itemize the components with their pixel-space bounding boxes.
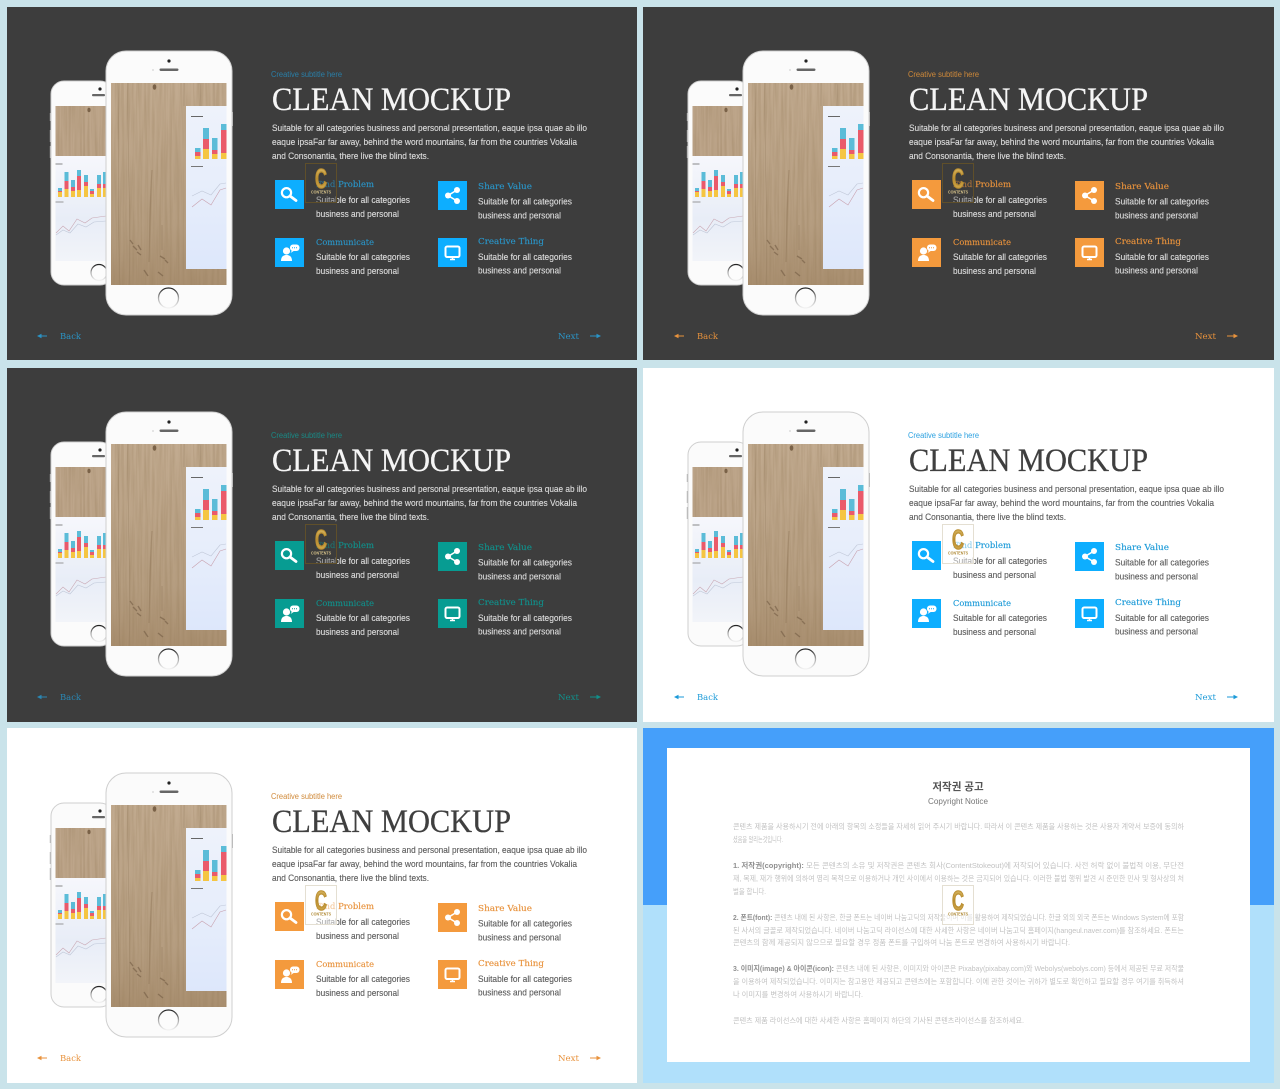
feature: communicate: Communicate [316, 960, 374, 970]
feature: creative thing: Creative Thing [1115, 237, 1182, 247]
title: CLEAN MOCKUP [909, 82, 1148, 118]
notice intro: 셨음을 알리는것입니다. [733, 834, 783, 844]
notice section 3 [733, 963, 1184, 999]
feature: creative thing: Suitable for all categories [478, 974, 572, 984]
feature: find problem: Find Problem [316, 541, 374, 551]
feature: share value: Suitable for all categories [1115, 196, 1209, 206]
subtitle: Creative subtitle here [908, 431, 980, 440]
phone mockups [687, 412, 870, 676]
watermark: CONTENTS [948, 190, 968, 194]
notice section 1: 재, 복제, 재가 행위에 의하여 영리 목적으로 이용하거나 개인 사이에서 이용하는 것은 금지되어 있습니다. 이러한 불법 행위 발견 시 준민한 민사 및 형사상의 처 [733, 873, 1184, 883]
watermark: C [952, 885, 964, 916]
next link: Next [558, 332, 580, 342]
feature: share value: business and personal [478, 932, 561, 942]
feature: creative thing: business and personal [478, 266, 561, 276]
feature: communicate [275, 960, 410, 998]
watermark [306, 163, 336, 202]
next link [558, 1054, 601, 1064]
feature: find problem: business and personal [953, 209, 1036, 219]
feature: find problem: business and personal [316, 570, 399, 580]
feature: find problem: Find Problem [953, 180, 1011, 190]
phone mockups [50, 773, 233, 1037]
feature: find problem [912, 180, 1047, 219]
next link: Next [1195, 693, 1217, 703]
feature: share value: Suitable for all categories [478, 196, 572, 206]
watermark [942, 885, 974, 924]
feature: creative thing: Suitable for all categories [1115, 613, 1209, 623]
feature: find problem [275, 180, 410, 219]
feature: find problem [275, 541, 410, 580]
feature: communicate: Communicate [953, 599, 1011, 609]
feature: communicate: Communicate [316, 238, 374, 248]
feature: creative thing: Creative Thing [1115, 598, 1182, 608]
feature: find problem: Find Problem [953, 541, 1011, 551]
feature: share value: business and personal [478, 210, 561, 220]
feature: creative thing: Creative Thing [478, 598, 545, 608]
feature: creative thing [438, 598, 572, 636]
title: CLEAN MOCKUP [272, 804, 511, 840]
subtitle: Creative subtitle here [271, 431, 343, 440]
notice section 2: 2. 폰트(font): 콘텐츠 내에 된 사항은, 한글 폰트는 네이버 나눔고딕의 저작물이며 이를 활용하여 제작되었습니다. 한글 외의 외국 폰트는 Windows System에 포함 [733, 912, 1184, 922]
description: eaque ipsaFar far away, behind the word mountains, far from the countries Vokalia [272, 498, 577, 508]
feature: communicate: business and personal [316, 266, 399, 276]
title: CLEAN MOCKUP [272, 443, 511, 479]
notice title: 저작권 공고 [932, 780, 984, 793]
feature: share value: Share Value [1115, 543, 1169, 553]
feature: creative thing [438, 237, 572, 276]
notice section 3: 을 이용하여 제작되었습니다. 이미지는 참고용만 제공되고 콘텐츠에는 포함합니다. 이에 관한 것이는 귀하가 별도로 확인하고 필요할 경우 여기를 취득하셔 [733, 976, 1184, 986]
feature: creative thing [1075, 237, 1209, 276]
description: eaque ipsaFar far away, behind the word mountains, far from the countries Vokalia [909, 498, 1214, 508]
watermark: CONTENTS [311, 912, 331, 916]
description: and Consonantia, there live the blind texts. [272, 512, 429, 522]
feature: find problem [275, 902, 410, 941]
description: Suitable for all categories business and personal presentation, eaque ipsa quae ab illo [272, 845, 587, 855]
next link [1195, 693, 1238, 703]
watermark: C [315, 163, 327, 194]
back link: Back [697, 332, 719, 342]
feature: share value: Share Value [1115, 182, 1169, 192]
feature: find problem: Suitable for all categories [316, 195, 410, 205]
notice card [667, 748, 1250, 1062]
feature: share value [438, 542, 572, 582]
watermark [306, 885, 336, 924]
back link [37, 332, 82, 342]
feature: communicate: Communicate [316, 599, 374, 609]
watermark: C [952, 524, 964, 555]
notice footer: 콘텐츠 제품 라이선스에 대한 사세한 사항은 홈페이지 하단의 기사된 콘텐츠라이선스를 참조하세요. [733, 1015, 1024, 1025]
title: CLEAN MOCKUP [272, 82, 511, 118]
phone mockups [50, 412, 233, 676]
feature: find problem: Find Problem [316, 180, 374, 190]
back link [674, 693, 719, 703]
feature: communicate: Suitable for all categories [316, 613, 410, 623]
feature: creative thing: business and personal [478, 626, 561, 636]
description: and Consonantia, there live the blind texts. [272, 151, 429, 161]
feature: creative thing: Creative Thing [478, 237, 545, 247]
feature: communicate: business and personal [316, 988, 399, 998]
next link [1195, 332, 1238, 342]
watermark: CONTENTS [948, 912, 968, 916]
feature: creative thing [1075, 598, 1209, 636]
description: Suitable for all categories business and personal presentation, eaque ipsa quae ab illo [909, 123, 1224, 133]
back link: Back [60, 693, 82, 703]
feature: share value [1075, 542, 1209, 582]
feature: share value: Suitable for all categories [478, 918, 572, 928]
feature: share value: Share Value [478, 904, 532, 914]
phone mockups [50, 51, 233, 315]
description [909, 123, 1224, 161]
back link: Back [697, 693, 719, 703]
feature: find problem: Suitable for all categories [316, 556, 410, 566]
feature: communicate [912, 238, 1047, 276]
description: Suitable for all categories business and personal presentation, eaque ipsa quae ab illo [272, 123, 587, 133]
watermark: CONTENTS [311, 190, 331, 194]
back link [37, 693, 82, 703]
feature: find problem: business and personal [953, 570, 1036, 580]
panel: dark slide orange [643, 7, 1274, 360]
feature: creative thing: Creative Thing [478, 959, 545, 969]
feature: communicate [275, 238, 410, 276]
feature: share value: business and personal [478, 572, 561, 582]
subtitle: Creative subtitle here [271, 70, 343, 79]
notice section 2: 콘텐츠의 함께 제공되지 않으므로 필요할 경우 정품 폰트를 구입하여 나눔 폰트로 변경하여 사용하시기 바랍니다. [733, 937, 1070, 947]
feature: find problem: Find Problem [316, 902, 374, 912]
feature: find problem: business and personal [316, 931, 399, 941]
feature: communicate [275, 599, 410, 637]
feature: share value [438, 181, 572, 220]
back link: Back [60, 332, 82, 342]
description: Suitable for all categories business and personal presentation, eaque ipsa quae ab illo [272, 484, 587, 494]
description: and Consonantia, there live the blind texts. [272, 873, 429, 883]
feature: share value: Share Value [478, 543, 532, 553]
feature: creative thing [438, 959, 572, 998]
description: and Consonantia, there live the blind texts. [909, 512, 1066, 522]
panel: dark slide teal [7, 368, 637, 722]
description: Suitable for all categories business and personal presentation, eaque ipsa quae ab illo [909, 484, 1224, 494]
notice section 1 [733, 860, 1184, 896]
description [272, 123, 587, 161]
next link: Next [1195, 332, 1217, 342]
panel: white slide orange [7, 728, 637, 1083]
notice section 2 [733, 912, 1184, 947]
panel: white slide blue [643, 368, 1274, 722]
panel: dark slide blue [7, 7, 637, 360]
watermark [942, 524, 974, 564]
notice section 3: 나 이미지를 변경하여 사용하시기 바랍니다. [733, 989, 863, 999]
back link [674, 332, 719, 342]
phone mockups [687, 51, 870, 315]
feature: share value: Suitable for all categories [1115, 558, 1209, 568]
notice section 1: 1. 저작권(copyright): 모든 콘텐츠의 소유 및 저작권은 콘텐츠 회사(ContentStokeout)에 저작되어 있습니다. 사전 허락 없이 불법적 이용, 무단전 [733, 860, 1184, 870]
feature: communicate: Communicate [953, 238, 1011, 248]
feature: share value: business and personal [1115, 210, 1198, 220]
feature: find problem: Suitable for all categories [953, 195, 1047, 205]
notice intro: 콘텐츠 제품을 사용하시기 전에 아래의 항목의 소정들을 자세히 읽어 주시기 바랍니다. 따라서 이 콘텐츠 제품을 사용하는 것은 사용자 계약서 보증에 동의하 [733, 821, 1184, 831]
description: eaque ipsaFar far away, behind the word mountains, far from the countries Vokalia [272, 137, 577, 147]
feature: communicate: business and personal [316, 627, 399, 637]
feature: creative thing: Suitable for all categories [1115, 252, 1209, 262]
notice intro [733, 821, 1184, 844]
feature: communicate [912, 599, 1047, 637]
subtitle: Creative subtitle here [271, 792, 343, 801]
feature: creative thing: business and personal [1115, 266, 1198, 276]
notice subtitle: Copyright Notice [928, 797, 989, 806]
feature: find problem: Suitable for all categories [953, 556, 1047, 566]
feature: creative thing: business and personal [478, 988, 561, 998]
feature: creative thing: business and personal [1115, 626, 1198, 636]
description: eaque ipsaFar far away, behind the word mountains, far from the countries Vokalia [272, 859, 577, 869]
next link: Next [558, 1054, 580, 1064]
description: eaque ipsaFar far away, behind the word mountains, far from the countries Vokalia [909, 137, 1214, 147]
feature: communicate: Suitable for all categories [953, 613, 1047, 623]
title: CLEAN MOCKUP [909, 443, 1148, 479]
feature: share value [438, 903, 572, 942]
feature: share value: Share Value [478, 182, 532, 192]
watermark [306, 524, 336, 564]
notice section 1: 벌을 합니다. [733, 886, 766, 896]
back link: Back [60, 1054, 82, 1064]
description [909, 484, 1224, 522]
feature: share value: Suitable for all categories [478, 558, 572, 568]
subtitle: Creative subtitle here [908, 70, 980, 79]
watermark: C [315, 885, 327, 916]
notice section 3: 3. 이미지(image) & 아이콘(icon): 콘텐츠 내에 된 사항은, 이미지와 아이콘은 Pixabay(pixabay.com)와 Webolys(webolys.com) 등에서 제공된 무료 저작물 [733, 963, 1184, 973]
feature: find problem: business and personal [316, 209, 399, 219]
feature: communicate: Suitable for all categories [316, 252, 410, 262]
watermark [942, 163, 974, 202]
watermark: C [315, 524, 327, 555]
description [272, 845, 587, 883]
watermark: C [952, 163, 964, 194]
description: and Consonantia, there live the blind texts. [909, 151, 1066, 161]
feature: find problem [912, 541, 1047, 580]
next link: Next [558, 693, 580, 703]
feature: communicate: business and personal [953, 627, 1036, 637]
notice section 2: 된 사서의 글꼴로 제작되었습니다. 네이버 나눔고딕 라이선스에 대한 사세한 사항은 네이버 나눔고딕 홈페이지(hangeul.naver.com)를 참조하세요. 폰트는 [733, 925, 1184, 935]
back link [37, 1054, 82, 1064]
feature: creative thing: Suitable for all categories [478, 252, 572, 262]
feature: share value [1075, 181, 1209, 220]
feature: communicate: Suitable for all categories [953, 252, 1047, 262]
feature: communicate: Suitable for all categories [316, 974, 410, 984]
next link [558, 693, 601, 703]
feature: find problem: Suitable for all categories [316, 917, 410, 927]
next link [558, 332, 601, 342]
feature: communicate: business and personal [953, 266, 1036, 276]
feature: share value: business and personal [1115, 572, 1198, 582]
watermark: CONTENTS [311, 550, 331, 556]
description [272, 484, 587, 522]
watermark: CONTENTS [948, 550, 968, 556]
panel: copyright notice [643, 728, 1274, 1083]
feature: creative thing: Suitable for all categories [478, 613, 572, 623]
